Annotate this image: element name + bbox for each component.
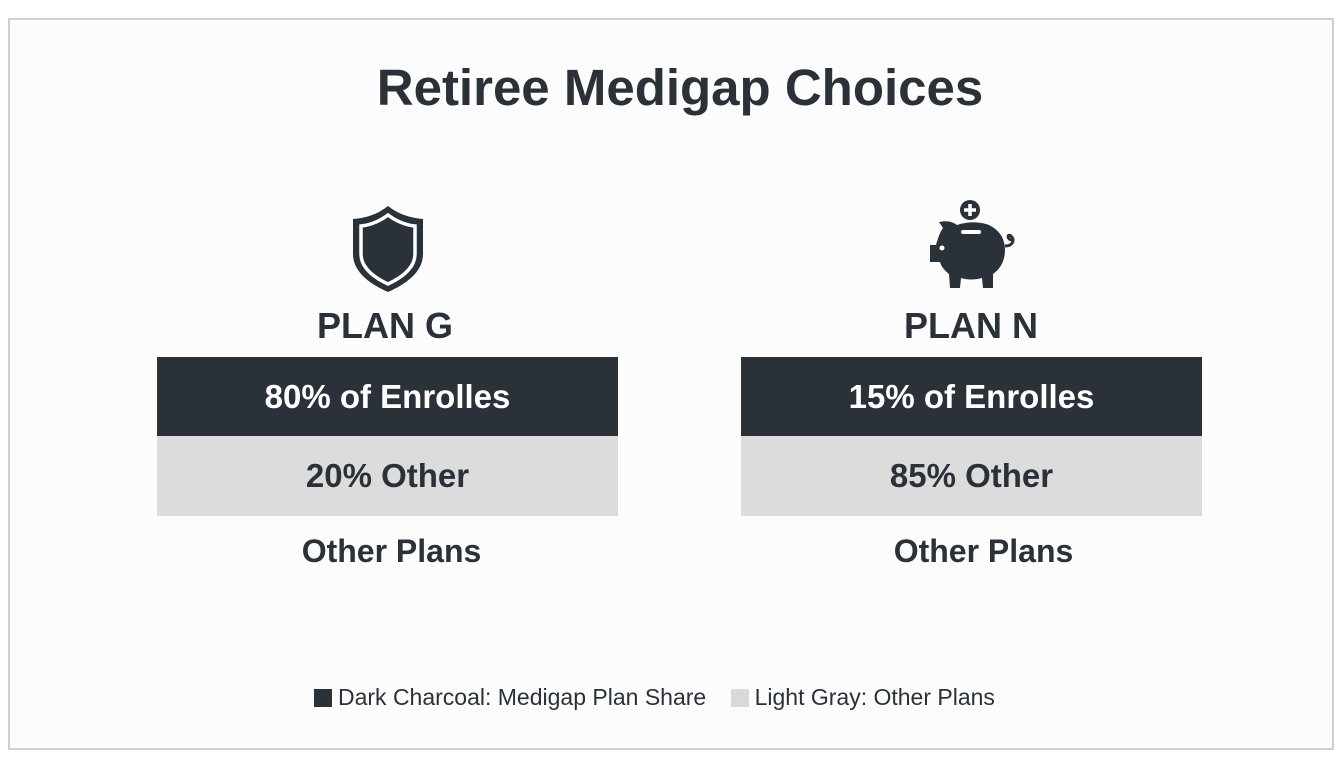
panel: plan N [741, 200, 1202, 569]
icon: piggy bank [930, 200, 1014, 288]
bar: 15%: 15% of Enrolles [849, 378, 1094, 415]
bar: 85% [741, 436, 1202, 516]
heading: PLAN G: PLAN G [317, 305, 453, 346]
bar: 85%: 85% Other [890, 457, 1053, 494]
label: other plans: Other Plans [302, 533, 481, 569]
bar: 15% [741, 357, 1202, 437]
bar: 20% [157, 436, 618, 516]
legend [314, 684, 995, 710]
bar: 20%: 20% Other [306, 457, 469, 494]
legend: light [338, 684, 995, 710]
legend: dark: Dark Charcoal: Medigap Plan Share Light Gray: Other Plans [338, 684, 995, 710]
heading: PLAN N: PLAN N [904, 305, 1038, 346]
bar: 80%: 80% of Enrolles [265, 378, 510, 415]
icon: shield [353, 206, 423, 292]
bar: 80% [157, 357, 618, 437]
title: Retiree Medigap Choices [377, 59, 983, 116]
panel: plan G [157, 206, 618, 569]
label: other plans: Other Plans [894, 533, 1073, 569]
